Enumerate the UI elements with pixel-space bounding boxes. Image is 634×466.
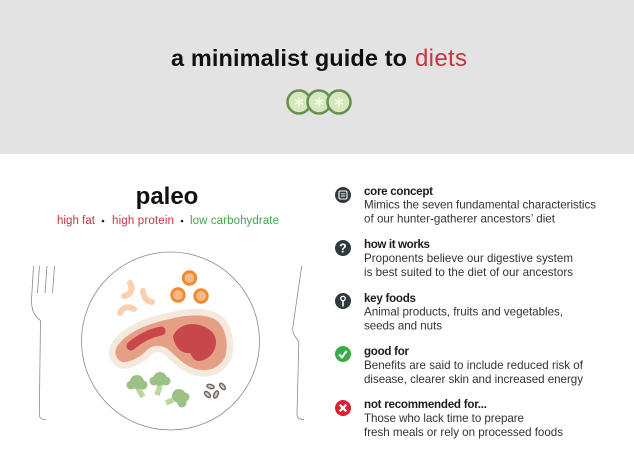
core concept text: core concept — [364, 185, 433, 198]
core concept text: Mimics the seven fundamental characteristics — [364, 198, 596, 212]
macronutrient summary: high protein — [112, 215, 174, 227]
macronutrient summary: high fat — [57, 215, 96, 227]
key foods text — [364, 292, 563, 332]
info: good for — [335, 345, 584, 386]
key foods text: Animal products, fruits and vegetables, — [364, 306, 563, 318]
broccoli — [126, 372, 190, 408]
how it works text — [364, 238, 573, 279]
not recommended text — [364, 398, 563, 439]
icon: document — [335, 187, 351, 203]
seeds — [203, 382, 226, 399]
macronutrient summary — [57, 215, 279, 227]
plate illustration — [82, 252, 260, 430]
icon: question mark: ? — [339, 242, 347, 256]
good for text: disease, clearer skin and increased energy — [364, 373, 583, 386]
how it works text: Proponents believe our digestive system — [364, 252, 573, 265]
icon: knife — [293, 266, 304, 420]
good for text — [364, 345, 584, 386]
how it works text: how it works — [364, 238, 430, 251]
not recommended text: fresh meals or rely on processed foods — [364, 426, 563, 439]
info: how it works — [335, 238, 573, 279]
info: core concept — [335, 185, 596, 226]
icon: question mark — [335, 240, 351, 256]
key foods text: seeds and nuts — [364, 320, 442, 332]
icon: cucumber slices — [288, 90, 350, 114]
icon: check mark — [335, 346, 351, 362]
info: key foods — [335, 292, 563, 332]
icon: key — [335, 293, 351, 309]
good for text: good for — [364, 345, 409, 358]
icon: cross — [335, 400, 351, 416]
good for text: Benefits are said to include reduced risk of — [364, 359, 584, 372]
not recommended text: not recommended for... — [364, 398, 487, 411]
how it works text: is best suited to the diet of our ancestors — [364, 266, 573, 279]
title: a minimalist guide to — [171, 45, 407, 71]
core concept text: of our hunter-gatherer ancestors’ diet — [364, 212, 556, 226]
cashews — [120, 283, 152, 313]
carrot slices — [172, 272, 207, 302]
macronutrient summary: low carbohydrate — [190, 215, 279, 227]
core concept text — [364, 185, 596, 226]
title: diets — [415, 45, 467, 72]
header band — [0, 0, 634, 154]
diet name heading: paleo — [136, 183, 198, 210]
info: not recommended for — [335, 398, 563, 439]
icon: fork — [32, 266, 54, 420]
plate rim — [82, 252, 260, 430]
steak — [115, 315, 227, 370]
not recommended text: Those who lack time to prepare — [364, 412, 524, 425]
key foods text: key foods — [364, 292, 416, 305]
